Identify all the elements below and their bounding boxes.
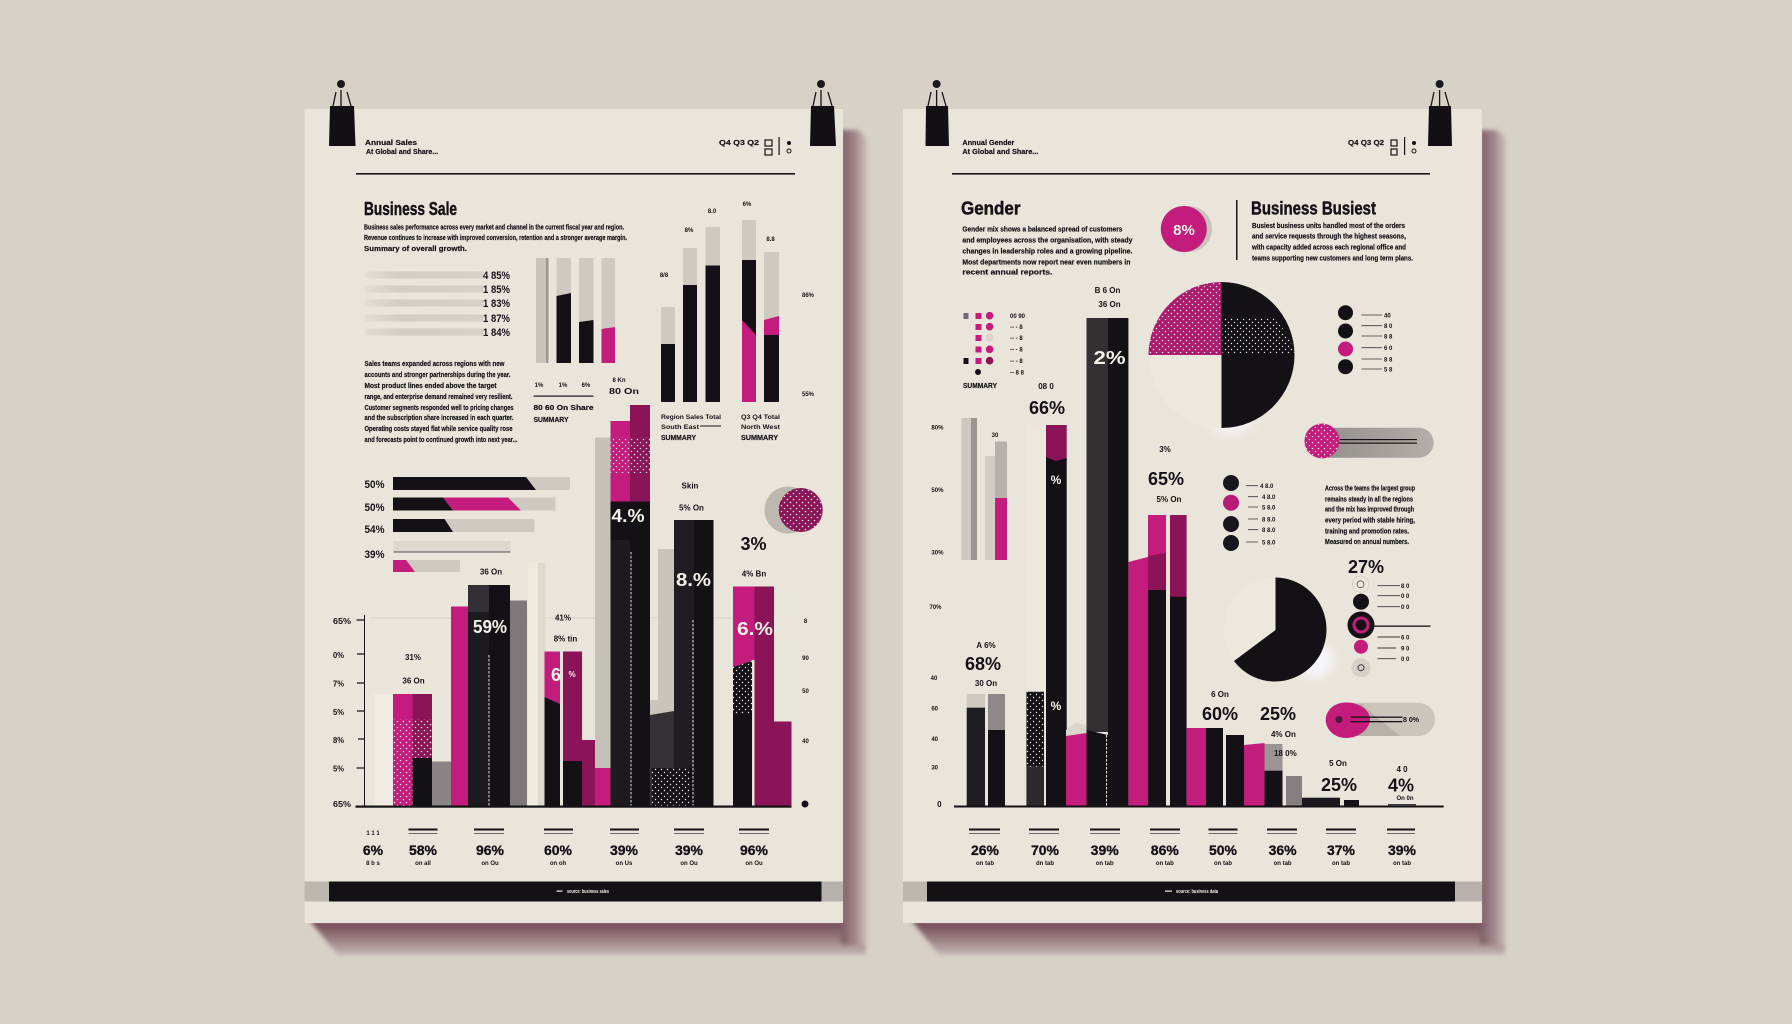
badge: 8 percent: 8% — [1173, 222, 1195, 239]
y axis: 7% — [333, 680, 344, 688]
bar value labels: 4 0 — [1396, 765, 1408, 774]
bar value labels: 5% On — [1157, 495, 1182, 504]
bar value labels: 8% tin — [554, 634, 577, 644]
side text block: every period with stable hiring, — [1325, 518, 1415, 524]
bottom statistics row: on tab — [1332, 861, 1350, 867]
legend: circles middle: 5 8.0 — [1262, 506, 1276, 512]
icon: dotted circle — [764, 486, 823, 534]
bar value labels: 08 0 — [1038, 382, 1054, 391]
bottom statistics row: on Ou — [680, 861, 698, 867]
bottom statistics row: 96% — [476, 842, 505, 858]
left axis labels: 30 — [931, 766, 939, 772]
poster sheet — [304, 109, 843, 923]
bar value labels: 36 On — [402, 676, 425, 686]
badge: 8 percent — [1161, 206, 1212, 252]
bar value labels: 36 On — [480, 568, 502, 576]
gender intro text: and employees across the organisation, with steady — [962, 238, 1133, 244]
chart: small left bars — [962, 418, 1007, 560]
bar: 59 percent — [451, 585, 527, 806]
intro text: Business sales performance across every market and channel in the current fiscal year and region. — [364, 224, 624, 232]
business text — [1251, 223, 1413, 262]
chart: tall stacked bars: SUMMARY — [661, 435, 696, 442]
intro text — [364, 224, 627, 253]
bottom statistics row — [363, 828, 769, 867]
small bars caption: 80 On — [609, 387, 639, 396]
small bars caption: 1% — [535, 383, 544, 389]
bar value labels: A 6% — [976, 641, 996, 650]
right axis labels: 50 — [802, 689, 809, 695]
dot matrix legend: -- - 8 — [1010, 325, 1023, 331]
footer band: source: business data — [1176, 889, 1218, 895]
dot matrix legend: 00 90 — [1010, 314, 1026, 320]
poster shadow — [310, 130, 867, 955]
baseline — [356, 806, 792, 808]
chart: tall stacked bars — [660, 202, 815, 442]
bar value labels: 25% — [1260, 704, 1296, 724]
header left text — [962, 140, 1038, 156]
body text block: and forecasts point to continued growth into next year... — [364, 437, 518, 444]
chart: horizontal stacked bars — [364, 477, 570, 572]
pie legend: 6 0 — [1384, 346, 1393, 352]
bottom statistics row: 26% — [971, 842, 1000, 858]
bottom statistics row: on tab — [1214, 861, 1232, 867]
divider line — [1236, 200, 1238, 260]
bar value labels: 66% — [1029, 398, 1065, 418]
y axis: 65% — [333, 617, 351, 626]
bottom statistics row: 86% — [1151, 842, 1179, 858]
bottom statistics row: on tab — [1274, 861, 1292, 867]
pie legend icons: 6 0 — [1401, 636, 1410, 642]
footer band — [903, 882, 1482, 902]
header right meta — [1348, 137, 1416, 155]
bottom statistics row: 37% — [1327, 842, 1356, 858]
bar: magenta dotted — [374, 694, 451, 806]
bottom statistics row: 8 b s — [366, 861, 380, 867]
bar value labels: 25% — [1321, 775, 1357, 795]
y axis: 5% — [333, 708, 344, 717]
pie legend: 40 — [1384, 314, 1391, 320]
chart: tall stacked bars: SUMMARY — [741, 435, 778, 442]
bottom statistics row: on Us — [616, 861, 633, 867]
legend: circles middle: 8 8.0 — [1262, 528, 1276, 534]
bottom statistics row: 96% — [740, 842, 769, 858]
footer band — [304, 882, 843, 902]
bar: 6 percent pair: 6 — [551, 665, 561, 685]
binder clip left — [926, 80, 949, 146]
legend: circles middle: 4 8.0 — [1260, 484, 1274, 490]
header right meta — [719, 137, 791, 155]
bar value labels: 3% — [740, 534, 767, 554]
body text block: Sales teams expanded across regions with new — [364, 361, 505, 368]
legend: circles middle: 5 8.0 — [1262, 540, 1276, 546]
heading: Business Busiest: Business Busiest — [1251, 198, 1376, 218]
right axis labels: 40 — [802, 739, 809, 745]
small bars caption: SUMMARY — [534, 417, 569, 424]
header left text — [365, 140, 438, 156]
right axis labels: 90 — [802, 656, 809, 662]
pie legend icons: 8 0 — [1401, 584, 1410, 590]
dot matrix legend: -- - 8 — [1010, 336, 1023, 342]
left axis labels: 60 — [931, 706, 939, 712]
side text block — [1325, 486, 1415, 546]
body text block: Operating costs stayed flat while service quality rose — [364, 426, 513, 433]
chart: tall stacked bars: 55% — [802, 392, 815, 398]
chart: tall stacked bars: 8.8 — [766, 237, 775, 243]
side text block: Across the teams the largest group — [1325, 486, 1415, 492]
intro text: Summary of overall growth. — [364, 246, 467, 253]
bar: 6 percent magenta — [733, 586, 792, 806]
bar value labels — [402, 482, 767, 686]
chart: horizontal stacked bars: 54% — [364, 524, 385, 536]
business text: teams supporting new customers and long term plans. — [1252, 256, 1413, 262]
pie legend icons: 0 0 — [1401, 657, 1410, 663]
panel: right poster — [903, 80, 1506, 955]
bottom statistics row — [969, 828, 1417, 867]
bar: 6 percent pair — [544, 652, 611, 806]
pie legend icons — [1348, 576, 1430, 677]
bar value labels: 65% — [1148, 469, 1184, 489]
chart: small left bars: 30 — [992, 433, 999, 439]
pie legend icons: 0 0 — [1401, 594, 1410, 600]
chart: light ranking bars: 1 85% — [483, 284, 510, 296]
chart: tall stacked bars: 8.0 — [708, 209, 717, 215]
bottom statistics row: on oh — [550, 861, 566, 867]
bar value labels: 30 On — [975, 679, 997, 688]
bottom statistics row: 1 1 1 — [366, 831, 380, 837]
chart: light ranking bars: 1 87% — [483, 313, 510, 325]
bar: 2 percent tallest — [1086, 318, 1128, 806]
chart: tall stacked bars: Region Sales Total — [661, 415, 721, 421]
pie legend — [1338, 305, 1393, 374]
pie legend icons: 0 0 — [1401, 605, 1410, 611]
pie legend: 5 8 — [1384, 368, 1393, 374]
bar: dotted black — [1026, 692, 1044, 807]
bottom statistics row: on tab — [1393, 861, 1411, 867]
bottom statistics row: 50% — [1209, 842, 1238, 858]
business text: with capacity added across each regional office and — [1251, 244, 1406, 252]
bar value labels: On 0n — [1396, 796, 1414, 802]
chart: horizontal stacked bars: 50% — [364, 479, 385, 491]
bar value labels: 18 0% — [1274, 749, 1297, 758]
chart: horizontal stacked bars: 39% — [364, 549, 385, 561]
header left text: At Global and Share... — [366, 149, 438, 156]
side text block: training and promotion rates. — [1325, 528, 1409, 536]
dot matrix legend: -- 8 8 — [1010, 370, 1025, 376]
chart: light ranking bars: 4 85% — [483, 270, 510, 282]
small bars caption: 6% — [582, 383, 591, 389]
poster sheet — [903, 109, 1482, 923]
left axis labels — [929, 426, 944, 809]
pill indicator — [1326, 702, 1435, 738]
baseline — [954, 806, 1444, 808]
bar value labels: 4% On — [1271, 730, 1296, 739]
y axis: 5% — [333, 764, 344, 774]
bar value labels: 4% — [1388, 776, 1414, 796]
panel: left poster — [304, 80, 867, 955]
binder clip right — [1428, 80, 1452, 146]
bars: descending run — [1187, 728, 1359, 806]
pie legend: 8 8 — [1384, 334, 1393, 340]
pie legend icons: 9 0 — [1401, 646, 1410, 652]
left axis labels: 50% — [931, 488, 944, 494]
header right meta: Q4 Q3 Q2 — [1348, 140, 1384, 147]
y axis: 65% — [333, 800, 351, 809]
bottom statistics row: 39% — [675, 842, 704, 858]
chart: tall stacked bars: 86% — [802, 293, 815, 299]
chart: tall stacked bars: 6% — [743, 202, 752, 208]
small bars caption: 1% — [559, 383, 568, 389]
y axis: 8% — [333, 736, 344, 745]
bar value labels: 60% — [1202, 704, 1238, 724]
chart: small stacked bars — [536, 258, 615, 363]
bottom statistics row: 70% — [1031, 842, 1060, 858]
bottom statistics row: 6% — [363, 842, 384, 858]
left axis labels: 80% — [931, 426, 944, 432]
bar: 8 percent — [650, 520, 714, 806]
bar value labels: Skin — [682, 482, 699, 490]
bar value labels: 68% — [965, 654, 1001, 674]
bar value labels: 5 On — [1329, 759, 1347, 768]
bar: 2 percent tallest: 2% — [1094, 348, 1126, 368]
chart: horizontal stacked bars: 50% — [364, 502, 385, 514]
legend: circles middle: 8 8.0 — [1262, 518, 1276, 524]
header rule — [356, 173, 795, 175]
bottom statistics row: on Ou — [481, 861, 499, 867]
gender intro text: Most departments now report near even numbers in — [962, 260, 1130, 266]
stat: 27 percent: 27% — [1348, 557, 1384, 577]
small bars caption — [534, 378, 639, 424]
body text block — [364, 361, 518, 444]
chart: light ranking bars — [364, 270, 510, 339]
header rule — [952, 173, 1430, 175]
dot matrix legend — [963, 312, 1026, 390]
left axis labels: 70% — [929, 605, 942, 611]
bottom statistics row: on Ou — [745, 861, 763, 867]
header left text: Annual Sales — [365, 140, 417, 147]
chart: main bar chart — [954, 286, 1444, 808]
y axis — [333, 615, 365, 809]
poster shadow — [912, 130, 1506, 955]
pie legend: 8 0 — [1384, 324, 1393, 330]
bar: 4 percent tallest: 4.% — [612, 506, 644, 526]
header right meta: Q4 Q3 Q2 — [719, 140, 759, 147]
bottom statistics row: 58% — [409, 842, 438, 858]
side text block: Measured on annual numbers. — [1325, 539, 1409, 546]
heading: Gender: Gender — [961, 198, 1020, 218]
bar: magenta low — [1066, 723, 1086, 806]
bottom statistics row: on tab — [976, 861, 994, 867]
dot matrix legend: SUMMARY — [963, 383, 997, 390]
chart: light ranking bars: 1 83% — [483, 298, 510, 310]
bar: percent labels black — [1046, 425, 1067, 806]
left axis labels: 40 — [931, 737, 939, 743]
chart: tall stacked bars: 8% — [685, 228, 694, 234]
chart: light ranking bars: 1 84% — [483, 327, 510, 339]
bar value labels: 31% — [405, 653, 421, 662]
legend: circles middle — [1223, 475, 1276, 551]
header left text: Annual Gender — [962, 140, 1015, 147]
body text block: and the subscription share increased in each quarter. — [364, 415, 514, 422]
chart: tall stacked bars: 8/8 — [660, 273, 669, 279]
legend: circles middle: 4 8.0 — [1262, 495, 1276, 501]
bottom statistics row: on all — [415, 861, 431, 867]
bottom statistics row: 39% — [1388, 842, 1417, 858]
bar: 59 percent: 59% — [473, 617, 507, 637]
binder clip right — [810, 80, 836, 146]
y axis: 0% — [333, 651, 344, 660]
header left text: At Global and Share... — [962, 149, 1038, 156]
intro text: Revenue continues to increase with improved conversion, retention and a stronger average margin. — [364, 235, 627, 242]
bottom statistics row: 39% — [610, 842, 639, 858]
bar value labels: B 6 On — [1095, 286, 1121, 295]
bottom statistics row: on tab — [1096, 861, 1114, 867]
bottom statistics row: 36% — [1269, 842, 1297, 858]
heading: Business Sale: Business Sale — [364, 199, 457, 219]
chart: tall stacked bars: South East — [661, 425, 699, 431]
pie chart: wedge — [1224, 578, 1333, 681]
pie legend: 8 8 — [1384, 358, 1393, 364]
footer band: source: business sales — [567, 889, 609, 895]
pill indicator: 8 0% — [1403, 717, 1420, 724]
gender intro text: recent annual reports. — [962, 270, 1052, 276]
business text: and service requests through the highest seasons, — [1252, 234, 1406, 240]
bar: 4 percent tallest — [610, 405, 650, 806]
bar value labels: 3% — [1159, 445, 1171, 454]
dot matrix legend: -- - 8 — [1010, 359, 1023, 365]
gender intro text: Gender mix shows a balanced spread of customers — [962, 226, 1122, 234]
left axis labels: 40 — [931, 676, 938, 682]
binder clip left — [329, 80, 356, 146]
chart: tall stacked bars: Q3 Q4 Total — [741, 415, 780, 421]
bar value labels: 36 On — [1098, 300, 1121, 309]
business text: Busiest business units handled most of the orders — [1252, 223, 1405, 230]
body text block: Most product lines ended above the target — [364, 383, 497, 390]
bar: percent labels black: % — [1051, 699, 1062, 713]
gender intro text — [962, 226, 1133, 276]
bar value labels: 6 On — [1211, 690, 1229, 699]
small bars caption: 8 Kn — [612, 378, 626, 384]
body text block: range, and enterprise demand remained very resilient. — [364, 394, 513, 401]
bar: 8 percent: 8.% — [676, 570, 711, 590]
bar pair: 68 percent — [967, 694, 1005, 806]
pie chart: quarters — [1148, 282, 1294, 434]
left axis labels: 30% — [931, 550, 944, 556]
body text block: accounts and stronger partnerships during the year. — [364, 372, 511, 379]
side text block: and the mix has improved through — [1325, 506, 1414, 514]
small bars caption: 80 60 On Share — [534, 405, 594, 412]
bar: percent labels black: % — [1051, 473, 1062, 487]
dot matrix legend: -- - 8 — [1010, 348, 1023, 354]
chart: main bar chart — [333, 405, 809, 809]
side text block: remains steady in all the regions — [1325, 496, 1413, 504]
right axis labels — [802, 619, 809, 808]
bottom statistics row: 39% — [1091, 842, 1119, 858]
slider pill — [1304, 424, 1434, 458]
bar value labels: 41% — [555, 614, 571, 622]
body text block: Customer segments responded well to pricing changes — [364, 405, 514, 412]
bar: 6 percent magenta: 6.% — [737, 619, 773, 639]
bar: 6 percent pair: % — [568, 670, 576, 679]
right axis labels: 8 — [804, 619, 808, 625]
bars: 65 percent group — [1128, 515, 1187, 806]
bar value labels — [965, 286, 1414, 802]
bar value labels: 5% On — [679, 504, 704, 512]
bottom statistics row: dn tab — [1036, 861, 1054, 867]
bar value labels: 4% Bn — [742, 570, 766, 578]
gender intro text: changes in leadership roles and a growing pipeline. — [962, 248, 1132, 256]
bottom statistics row: 60% — [544, 842, 573, 858]
left axis labels: 0 — [937, 800, 942, 809]
bottom statistics row: on tab — [1156, 861, 1174, 867]
chart: tall stacked bars: North West — [741, 425, 780, 431]
